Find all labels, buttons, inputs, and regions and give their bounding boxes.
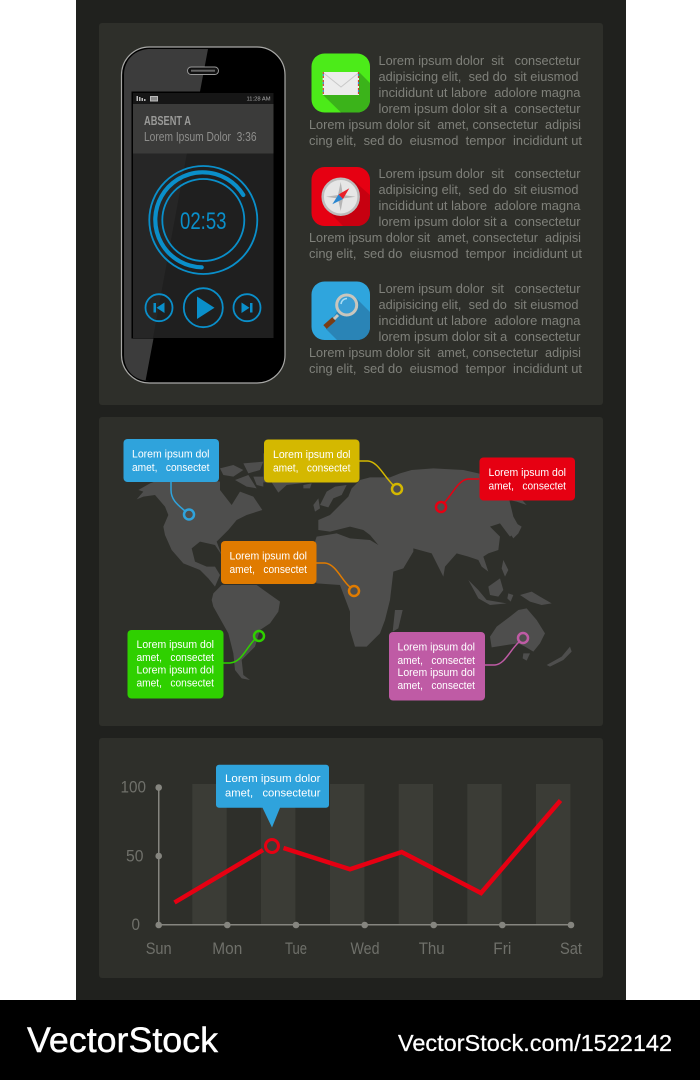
connector: green callout [223,631,264,663]
app icon: mail [312,54,370,112]
countdown timer dial [149,166,257,274]
text block: magnifier: lorem ipsum dolor sit a consectetur [378,330,580,344]
callout: green: amet, consectet [136,678,214,690]
x axis labels: Wed [350,940,380,958]
playback controls [146,288,260,327]
y axis labels: 0 [132,915,140,934]
callout: orange: Lorem ipsum dol [230,550,307,562]
track title: ABSENT A [144,114,191,128]
callout: red: amet, consectet [488,480,566,492]
text block: mail: incididunt ut labore adolore magna [378,86,581,100]
callout: yellow: amet, consectet [273,462,350,474]
connector: blue callout [171,482,194,520]
callout: blue [124,439,219,482]
x axis labels: Sun [146,940,172,958]
text block: mail: lorem ipsum dolor sit a consectetur [378,102,580,116]
text block: magnifier: Lorem ipsum dolor sit consectetur [378,282,580,296]
text block: compass [309,167,583,261]
chart tooltip [216,765,329,828]
callout: pink: Lorem ipsum dol [398,642,475,654]
text block: magnifier: cing elit, sed do eiusmod tempor incididunt ut [309,362,583,376]
world map: Europe, Asia, Africa, Oceania [303,468,572,667]
chart axes [155,784,574,928]
y axis labels: 100 [120,778,146,796]
app icon: magnifier [312,282,370,340]
panel: line chart [99,738,603,978]
x axis labels: Mon [212,940,242,958]
callout: orange: amet, consectet [230,564,307,576]
text block: magnifier: adipisicing elit, sed do sit eiusmod [378,298,579,312]
x axis labels: Fri [493,940,511,958]
text block: compass: Lorem ipsum dolor sit amet, consectetur adipisi [309,231,581,245]
callout: green: Lorem ipsum dol [136,664,214,676]
chart background bars [192,784,570,924]
callout: red: Lorem ipsum dol [488,467,566,479]
text block: magnifier: Lorem ipsum dolor sit amet, consectetur adipisi [309,346,581,360]
y axis labels [120,778,146,934]
callout: yellow: Lorem ipsum dol [273,449,350,461]
chart tooltip: Lorem ipsum dolor [225,773,321,785]
countdown timer dial: 02:53 [180,208,226,235]
callout: green: Lorem ipsum dol [136,639,214,651]
panel: world map [99,417,603,726]
text block: compass: incididunt ut labore adolore magna [378,199,581,213]
track title: Lorem Ipsum Dolor 3:36 [144,130,257,144]
text block: mail: cing elit, sed do eiusmod tempor incididunt ut [309,134,583,148]
y axis labels: 50 [126,846,144,866]
text block: magnifier: incididunt ut labore adolore magna [378,314,581,328]
phone mockup [122,47,285,383]
text block: compass: cing elit, sed do eiusmod tempor incididunt ut [309,247,583,261]
footer: watermark bar: VectorStock [27,1021,219,1060]
connector: pink callout [485,633,528,665]
callout: blue: Lorem ipsum dol [132,448,210,460]
x axis labels: Sat [560,940,582,958]
status bar: 11:28 AM [246,96,271,102]
text block: compass: Lorem ipsum dolor sit consectetur [378,167,580,181]
red data line [174,800,560,902]
connector: yellow callout [359,461,402,494]
callout: green: amet, consectet [136,652,214,664]
callout: green [128,630,224,698]
callout: pink [389,632,485,700]
callout: red [480,458,575,500]
x axis labels: Tue [285,940,307,958]
text block: compass: lorem ipsum dolor sit a consectetur [378,215,580,229]
x axis labels [146,940,582,958]
callout: pink: amet, consectet [398,680,475,692]
connector: red callout [436,479,479,512]
text block: mail: Lorem ipsum dolor sit consectetur [378,54,580,68]
text block: mail: adipisicing elit, sed do sit eiusmod [378,70,579,84]
text block: compass: adipisicing elit, sed do sit eiusmod [378,183,579,197]
status bar [136,96,271,102]
footer: watermark bar: VectorStock.com/1522142 [398,1030,672,1056]
callout: blue: amet, consectet [132,462,210,474]
track title [144,114,257,144]
connector: orange callout [316,563,359,596]
app icon: compass [312,167,370,226]
chart tooltip: amet, consectetur [225,788,321,800]
text block: mail: Lorem ipsum dolor sit amet, consectetur adipisi [309,118,581,132]
panel: phone and app descriptions [99,23,603,405]
world map: Americas and Greenland [137,453,308,680]
text block: mail [309,54,583,148]
footer: watermark bar [0,1000,700,1080]
callout: pink: amet, consectet [398,655,475,667]
callout: yellow [264,440,360,482]
callout: pink: Lorem ipsum dol [398,667,475,679]
text block: magnifier [309,282,583,376]
x axis labels: Thu [419,940,445,958]
callout: orange [221,541,316,584]
